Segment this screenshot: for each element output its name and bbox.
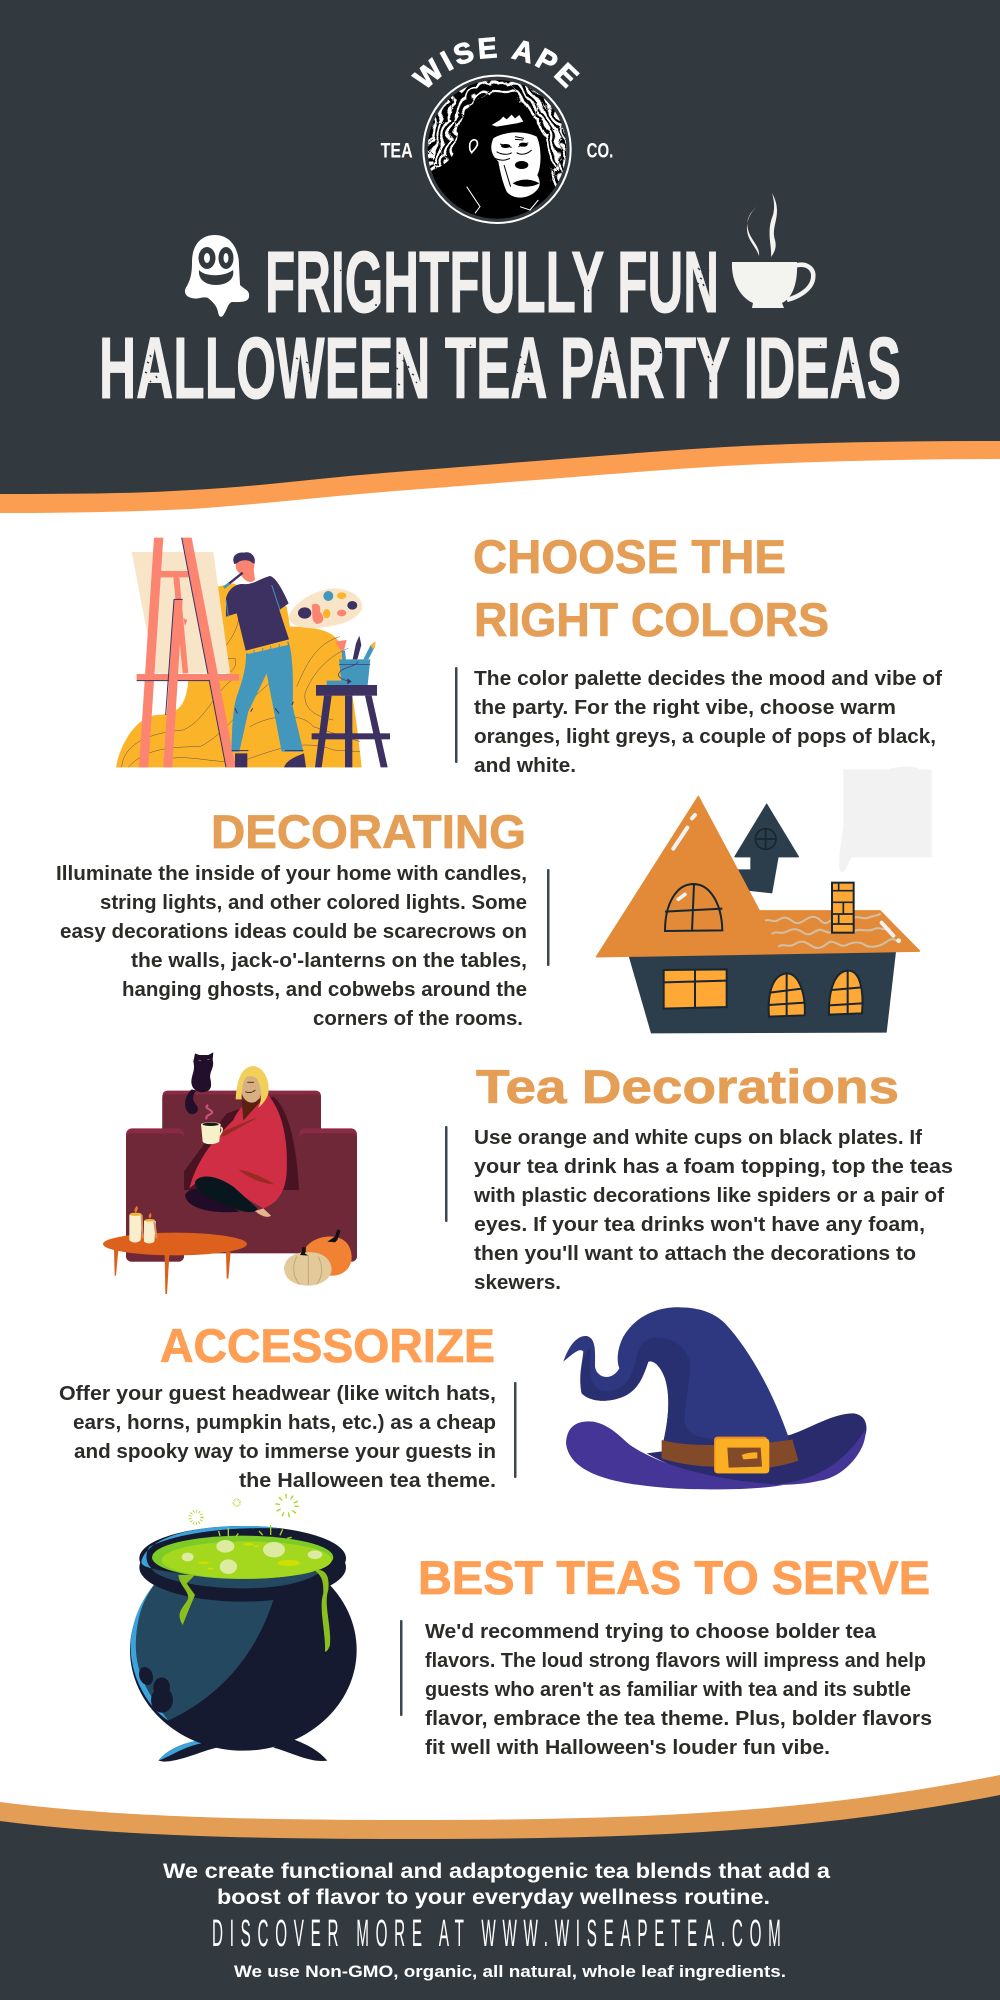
section: tea decorations — [445, 1060, 953, 1294]
icon: ghost — [185, 235, 249, 317]
footer text: We create functional and adaptogenic tea blends that add a — [163, 1860, 830, 1883]
illustration: bubbling cauldron — [130, 1496, 357, 1762]
heading: RIGHT COLORS — [474, 593, 829, 646]
body text: flavor, embrace the tea theme. Plus, bolder flavors — [425, 1707, 932, 1730]
heading — [473, 530, 829, 646]
footer text: We use Non-GMO, organic, all natural, whole leaf ingredients. — [234, 1962, 786, 1981]
body text — [425, 1620, 932, 1759]
body text — [473, 1126, 953, 1294]
section: best teas to serve — [400, 1551, 932, 1759]
illustration: haunted house — [597, 767, 932, 1033]
logo: Wise Ape Tea Co.: CO. — [587, 138, 613, 162]
body text: The color palette decides the mood and vibe of — [474, 667, 942, 690]
body text: and white. — [474, 754, 576, 777]
body text: string lights, and other colored lights. Some — [100, 891, 527, 914]
body text: and spooky way to immerse your guests in — [74, 1440, 496, 1463]
body text — [474, 667, 942, 777]
body text: oranges, light greys, a couple of pops of black, — [474, 725, 936, 748]
header band — [0, 0, 1000, 513]
heading: ACCESSORIZE — [160, 1319, 495, 1372]
body text: We'd recommend trying to choose bolder tea — [425, 1620, 877, 1643]
body text — [59, 1382, 496, 1492]
body text: eyes. If your tea drinks won't have any foam, — [474, 1213, 925, 1236]
section: choose the right colors — [455, 530, 942, 777]
body text: Use orange and white cups on black plates. If — [474, 1126, 922, 1149]
body text: fit well with Halloween's louder fun vibe. — [425, 1736, 830, 1759]
body text: with plastic decorations like spiders or a pair of — [473, 1184, 944, 1207]
body text: corners of the rooms. — [313, 1007, 523, 1030]
icon: tea cup with steam — [732, 193, 813, 308]
footer text: DISCOVER MORE AT WWW.WISEAPETEA.COM — [212, 1913, 781, 1955]
section: decorating — [56, 805, 550, 1030]
body text: hanging ghosts, and cobwebs around the — [122, 978, 527, 1001]
title — [99, 234, 901, 417]
body text: ears, horns, pumpkin hats, etc.) as a cheap — [73, 1411, 496, 1434]
footer band — [0, 1775, 1000, 2000]
body text: guests who aren't as familiar with tea and its subtle — [425, 1678, 911, 1701]
heading: CHOOSE THE — [473, 530, 786, 583]
body text: then you'll want to attach the decorations to — [474, 1242, 916, 1265]
footer text: boost of flavor to your everyday wellness routine. — [217, 1886, 770, 1909]
logo: Wise Ape Tea Co. — [380, 37, 613, 224]
heading: Tea Decorations — [476, 1060, 899, 1113]
footer text — [163, 1860, 830, 1981]
heading: BEST TEAS TO SERVE — [418, 1551, 930, 1604]
heading: DECORATING — [211, 805, 526, 858]
sparkles — [190, 1496, 296, 1523]
body text — [56, 862, 527, 1030]
body text: flavors. The loud strong flavors will impress and help — [425, 1649, 926, 1672]
body text: Offer your guest headwear (like witch hats, — [59, 1382, 496, 1405]
illustration: woman on armchair — [103, 1052, 357, 1294]
body text: the party. For the right vibe, choose warm — [474, 696, 896, 719]
logo: Wise Ape Tea Co.: WISE APE — [411, 37, 580, 89]
body text: the walls, jack-o'-lanterns on the tables, — [131, 949, 527, 972]
body text: easy decorations ideas could be scarecrows on — [60, 920, 527, 943]
illustration: painter at easel — [116, 538, 390, 767]
body text: your tea drink has a foam topping, top the teas — [474, 1155, 953, 1178]
section: accessorize — [59, 1319, 516, 1492]
body text: Illuminate the inside of your home with candles, — [56, 862, 527, 885]
body text: the Halloween tea theme. — [239, 1469, 496, 1492]
body text: skewers. — [474, 1271, 561, 1294]
logo: Wise Ape Tea Co.: TEA — [381, 138, 413, 162]
illustration: witch hat — [563, 1307, 866, 1489]
